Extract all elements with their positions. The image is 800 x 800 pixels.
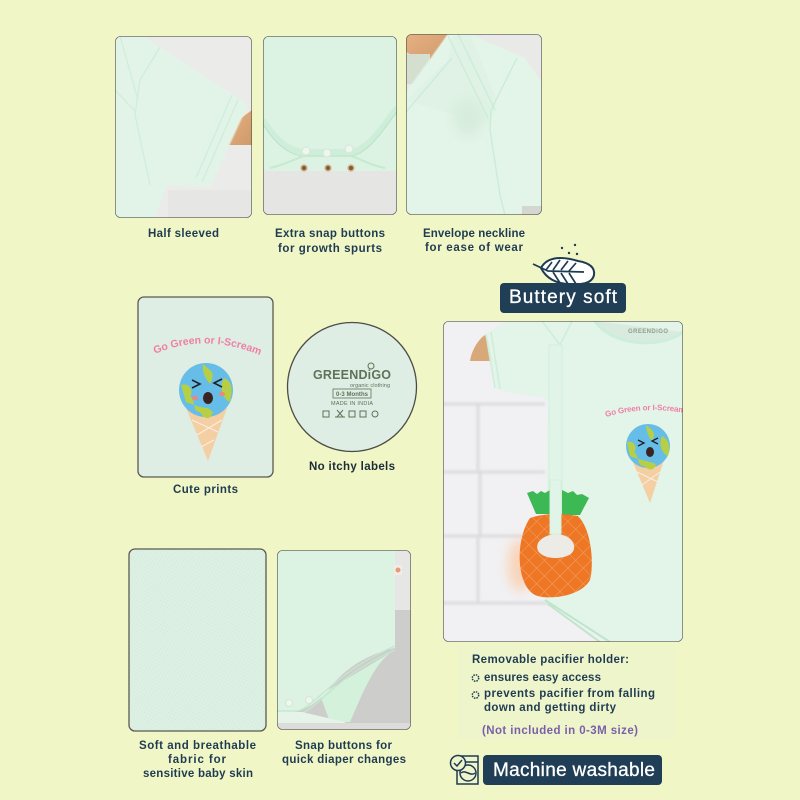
badge: buttery soft: Buttery soft	[509, 287, 618, 308]
text block: removable pacifier holder: Removable pacifier holder:	[472, 654, 629, 666]
caption: extra snap buttons: Extra snap buttons	[275, 228, 385, 240]
panel: envelope neckline photo	[406, 34, 542, 215]
caption: soft and breathable	[139, 740, 256, 780]
caption: half sleeved: Half sleeved	[148, 228, 219, 240]
caption: snap buttons	[282, 740, 406, 766]
caption: snap buttons: Snap buttons for	[295, 740, 393, 752]
text block: removable pacifier holder: prevents pacifier from falling	[484, 688, 655, 700]
ice cream globe print	[179, 363, 233, 461]
panel: no itchy labels circle: organic clothing	[350, 383, 390, 389]
panel: pacifier holder photo: GREENDiGO	[628, 329, 668, 335]
caption: soft and breathable: fabric for	[168, 754, 227, 766]
caption: extra snap buttons: for growth spurts	[278, 243, 382, 255]
panel: extra snap buttons photo	[263, 36, 397, 215]
panel: snap buttons photo	[277, 550, 411, 730]
icon: feather with dots	[533, 244, 594, 284]
caption: soft and breathable: sensitive baby skin	[143, 768, 253, 780]
ice cream globe print	[626, 424, 670, 503]
panel: cute prints	[137, 296, 274, 478]
badge: buttery soft	[500, 283, 626, 313]
panel: no itchy labels circle: 0-3 Months	[336, 392, 369, 398]
panel: pacifier holder photo	[443, 321, 683, 642]
text block: removable pacifier holder: ensures easy access	[484, 672, 601, 684]
badge: machine washable	[483, 755, 662, 785]
caption: envelope neckline: for ease of wear	[425, 242, 524, 254]
text block: removable pacifier holder: down and getting dirty	[484, 702, 617, 714]
caption: soft and breathable: Soft and breathable	[139, 740, 256, 752]
print slogan: Go Green or I-Scream	[154, 337, 261, 355]
pacifier teether	[508, 480, 592, 597]
print slogan: Go Green or I-Scream	[605, 404, 682, 416]
panel: half sleeved photo	[115, 36, 252, 218]
panel: no itchy labels circle	[288, 322, 416, 452]
caption: cute prints: Cute prints	[173, 484, 238, 496]
badge: machine washable: Machine washable	[493, 760, 655, 781]
text block: removable pacifier holder: (Not included in 0-3M size)	[482, 725, 638, 737]
caption: snap buttons: quick diaper changes	[282, 754, 406, 766]
panel: no itchy labels circle: MADE IN INDIA	[331, 401, 373, 407]
panel: breathable fabric	[129, 549, 266, 731]
caption: no itchy labels: No itchy labels	[309, 461, 395, 473]
text block: removable pacifier holder	[458, 645, 676, 740]
icon: washing machine	[450, 756, 478, 784]
panel: no itchy labels circle: GREENDiGO	[313, 368, 391, 382]
caption: envelope neckline: Envelope neckline	[423, 228, 525, 240]
caption: extra snap buttons	[275, 228, 385, 255]
caption: envelope neckline	[423, 228, 525, 254]
